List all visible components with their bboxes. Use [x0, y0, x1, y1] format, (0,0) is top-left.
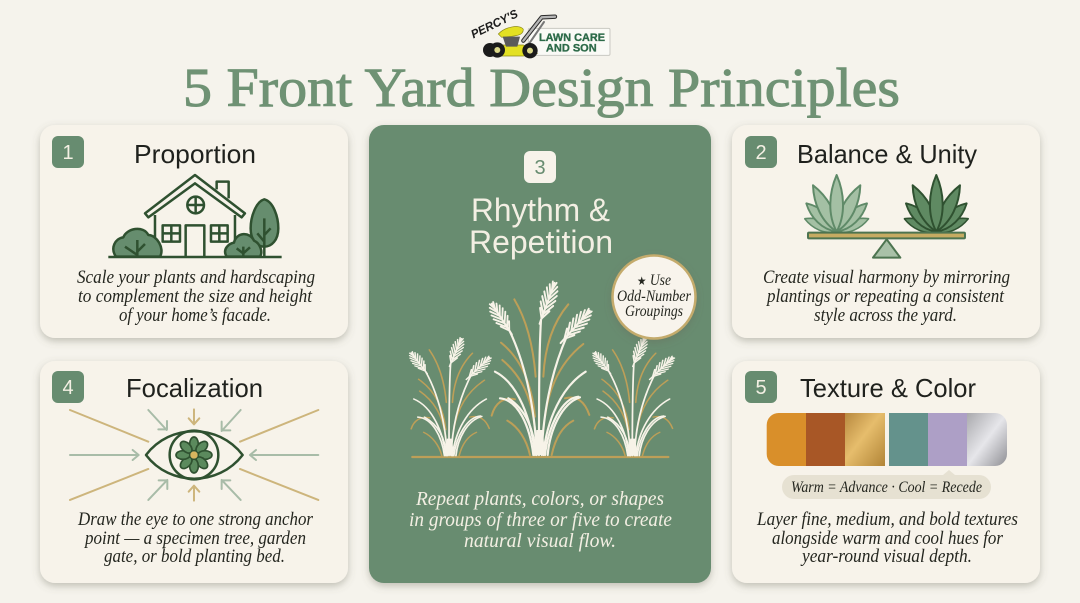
callout: use odd-number groupings: Groupings [625, 303, 683, 320]
text: Texture description: alongside warm and cool hues for [772, 529, 1004, 549]
callout: use odd-number groupings: Odd-Number [617, 288, 692, 305]
logo: Percy's Lawn Care and Son [469, 7, 610, 58]
flower pupil [176, 437, 212, 473]
light plant [802, 175, 871, 236]
callout: use odd-number groupings [612, 256, 696, 338]
badge 4 [52, 371, 84, 403]
text: Rhythm description: in groups of three or five to create [409, 509, 672, 531]
caption pill: warm advance, cool recede: Warm = Advance · Cool = Recede [791, 479, 982, 496]
panel: 4 Focalization [40, 361, 348, 583]
badge 1: 1 [62, 142, 74, 164]
swatches: warm and cool colors [767, 413, 1007, 466]
fulcrum [873, 239, 900, 258]
caption pill: warm advance, cool recede [782, 470, 991, 499]
logo sign: LAWN CARE [539, 32, 605, 44]
text: Rhythm description: Repeat plants, colors, or shapes [415, 488, 664, 510]
dark plant [902, 175, 971, 236]
text: Texture description: Layer fine, medium, and bold textures [756, 510, 1018, 530]
logo sign [528, 28, 610, 55]
panel: 2 Balance and Unity [732, 125, 1040, 338]
heading: Focalization: Focalization [126, 373, 263, 403]
illustration: three ornamental grass clumps [406, 280, 677, 457]
text: Texture description [756, 510, 1018, 567]
text: Focalization description [77, 510, 314, 567]
panel: 1 Proportion [40, 125, 348, 338]
mower illustration [483, 17, 555, 58]
badge 4: 4 [62, 377, 74, 399]
badge 5 [745, 371, 777, 403]
heading: Rhythm and Repetition: Rhythm & [471, 192, 610, 228]
text: Proportion description [77, 268, 315, 326]
badge 2 [745, 136, 777, 168]
text: Balance description: Create visual harmony by mirroring [763, 268, 1010, 288]
logo sign: AND SON [546, 43, 597, 55]
text: Rhythm description [409, 488, 672, 552]
heading: Texture and Color: Texture & Color [800, 373, 976, 403]
heading: Proportion: Proportion [134, 139, 256, 169]
beam [808, 233, 965, 238]
badge 3: 3 [534, 157, 546, 179]
callout: use odd-number groupings: ★ Use [637, 272, 671, 289]
title: 5 Front Yard Design Principles [183, 57, 900, 118]
icon: eye with converging arrows [70, 409, 318, 501]
badge 1 [52, 136, 84, 168]
text: Texture description: year-round visual depth. [800, 547, 972, 567]
heading: Rhythm and Repetition [469, 192, 613, 260]
badge 2: 2 [755, 142, 767, 164]
text: Focalization description: Draw the eye to one strong anchor [77, 510, 314, 530]
heading: Rhythm and Repetition: Repetition [469, 224, 613, 260]
text: Proportion description: to complement the size and height [78, 287, 313, 307]
panel: 5 Texture and Color [732, 361, 1040, 583]
badge 3 [524, 151, 556, 183]
text: Balance description: plantings or repeating a consistent [765, 287, 1005, 307]
text: Rhythm description: natural visual flow. [464, 530, 616, 552]
icon: two plants on a balance scale [802, 175, 971, 258]
badge 5: 5 [755, 377, 767, 399]
heading: Balance and Unity: Balance & Unity [797, 139, 977, 169]
text: Balance description [763, 268, 1010, 326]
text: Balance description: style across the yard. [814, 306, 957, 326]
text: Focalization description: gate, or bold planting bed. [104, 547, 285, 567]
panel: 3 Rhythm and Repetition [369, 125, 711, 583]
text: Focalization description: point — a specimen tree, garden [83, 529, 306, 549]
logo text: Percy's: PERCY'S [469, 7, 520, 41]
icon: house with bushes and tree [108, 175, 282, 257]
text: Proportion description: of your home’s facade. [119, 306, 271, 326]
text: Proportion description: Scale your plants and hardscaping [77, 268, 315, 288]
